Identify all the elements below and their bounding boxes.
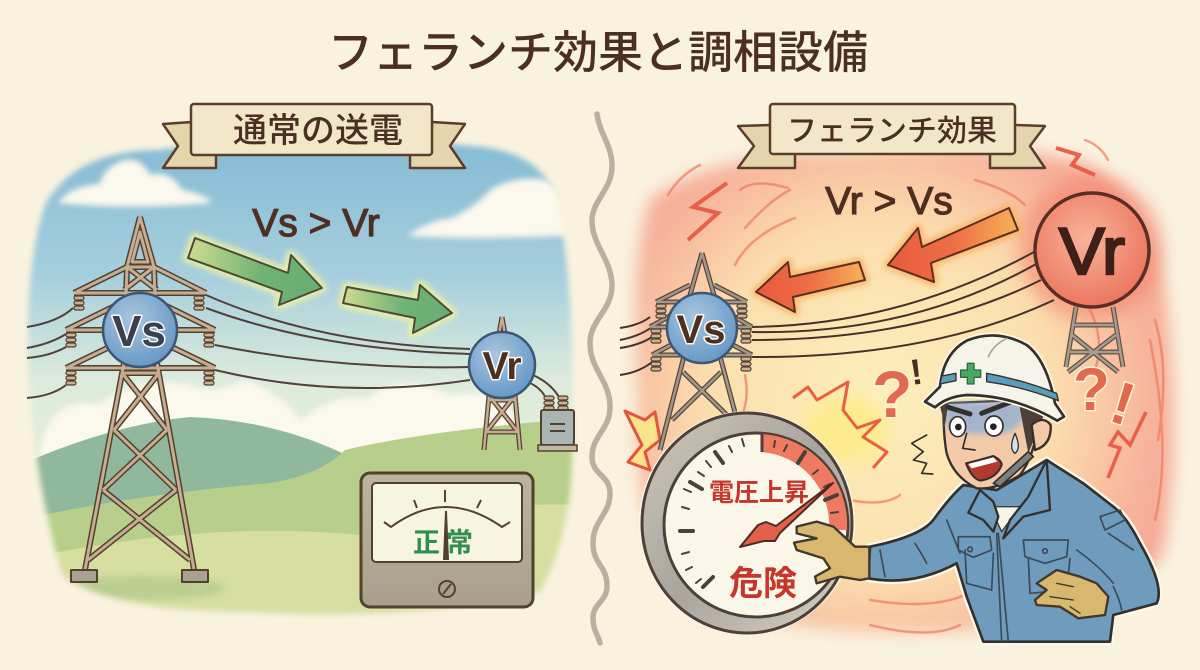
collar <box>968 460 1050 538</box>
title: フェランチ効果と調相設備 <box>328 27 868 78</box>
gauge: voltage rise: 危険 <box>729 565 797 603</box>
jacket details <box>880 510 1133 642</box>
burst outline <box>793 382 887 468</box>
label: Vr > Vs: Vr > Vs <box>825 180 953 223</box>
ear <box>1032 420 1051 450</box>
arrow: small red <box>756 262 865 312</box>
question mark: right: ? <box>1073 356 1110 423</box>
divider <box>590 114 612 643</box>
brows <box>948 402 1012 414</box>
gauge: voltage rise: 電圧上昇 <box>709 479 809 507</box>
arrow: large green <box>188 238 322 305</box>
tower: right Ferranti <box>1066 307 1123 372</box>
eyes <box>950 416 1003 437</box>
panel: normal transmission <box>20 104 585 640</box>
banner: Ferranti <box>738 104 1045 168</box>
sweat <box>1012 433 1018 453</box>
tower: Vr <box>484 317 520 450</box>
near hill <box>45 419 576 553</box>
question mark: left: ? <box>872 357 912 431</box>
banner: normal <box>163 104 465 168</box>
gauge: voltage rise <box>639 411 855 635</box>
circle: Vs Ferranti <box>667 293 737 363</box>
circle: Vr Ferranti: Vr <box>1059 214 1125 288</box>
circle: Vs: Vs <box>112 307 166 356</box>
heat swirls <box>668 140 1163 632</box>
exclamation: left: ! <box>907 351 925 393</box>
tower: Vs <box>66 217 215 582</box>
cream below sleeve <box>1095 575 1200 670</box>
glove right <box>1035 570 1108 618</box>
wires: Ferranti <box>620 252 1054 375</box>
shock marks <box>912 435 933 474</box>
circle: Vr Ferranti <box>1035 193 1149 307</box>
glow: Vr circle <box>1019 176 1163 320</box>
nose <box>963 433 975 450</box>
sky and landscape <box>20 125 585 640</box>
exclamation: right: ! <box>1103 369 1143 439</box>
lightning marks <box>688 148 1146 478</box>
arrow: small green <box>343 285 452 333</box>
banner: normal: 通常の送電 <box>233 112 403 150</box>
far hill <box>34 417 342 514</box>
tower: left Ferranti <box>650 253 752 450</box>
meter: normal: 正常 <box>413 528 479 558</box>
heat background <box>635 147 1173 633</box>
arrow: large red <box>888 208 1018 282</box>
circle: Vr: Vr <box>482 345 522 388</box>
burst: left of gauge <box>625 411 660 470</box>
mouth <box>966 456 1002 481</box>
panel: Ferranti effect <box>620 104 1200 670</box>
circle: Vs Ferranti: Vs <box>677 308 725 352</box>
transformer <box>530 375 577 451</box>
face <box>943 400 1037 488</box>
circle: Vr <box>469 332 535 398</box>
hair and strap <box>938 400 1043 453</box>
worker <box>794 335 1159 642</box>
glove left <box>794 522 869 583</box>
banner: Ferranti: フェランチ効果 <box>787 115 997 148</box>
glow behind burst <box>803 396 887 464</box>
fear shading <box>946 403 1025 435</box>
circle: Vs <box>103 293 177 367</box>
meter: normal <box>361 473 533 607</box>
jacket <box>868 460 1159 642</box>
shirt <box>990 507 1020 532</box>
helmet <box>925 335 1064 421</box>
label: Vs > Vr: Vs > Vr <box>252 202 380 245</box>
wires: normal <box>27 295 470 398</box>
